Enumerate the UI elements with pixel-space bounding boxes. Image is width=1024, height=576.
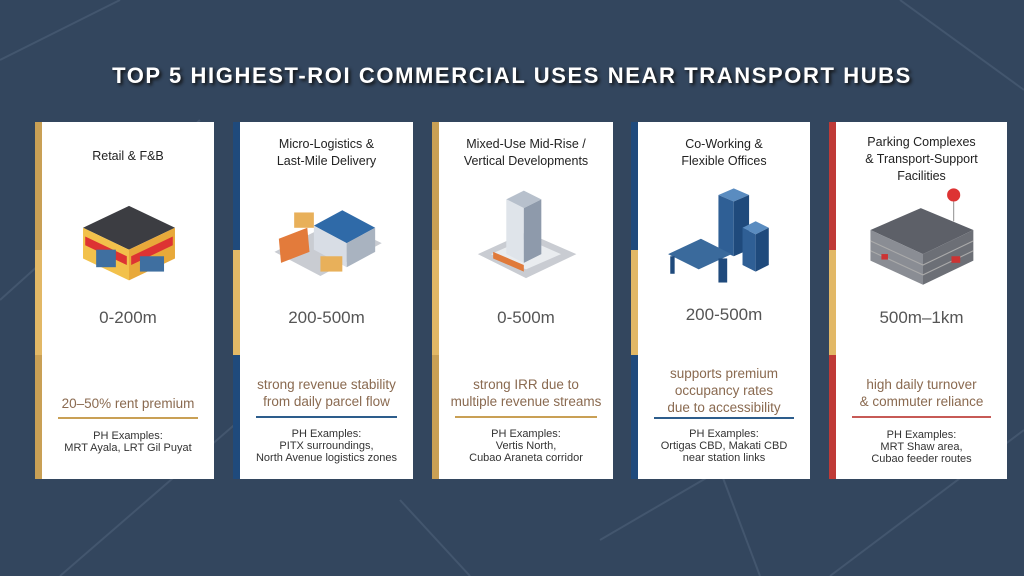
icon: parking building <box>870 188 974 285</box>
benefit: from daily parcel flow <box>263 394 390 409</box>
benefit: occupancy rates <box>675 383 773 398</box>
distance: 0-200m <box>99 308 157 327</box>
examples <box>661 428 787 464</box>
heading: Retail & F&B <box>92 149 164 163</box>
heading: & Transport-Support <box>865 152 978 166</box>
examples: Vertis North, <box>496 440 556 452</box>
examples: Cubao feeder routes <box>871 453 972 465</box>
benefit: supports premium <box>670 366 778 381</box>
panel: mixed-use <box>432 122 613 479</box>
heading <box>464 137 588 168</box>
panel: retail <box>35 122 214 479</box>
panel: co-working <box>631 122 810 479</box>
heading: Parking Complexes <box>867 135 976 149</box>
examples: PH Examples: <box>887 429 956 441</box>
examples: PITX surroundings, <box>279 440 374 452</box>
heading: Flexible Offices <box>681 154 767 168</box>
benefit: multiple revenue streams <box>451 394 601 409</box>
panel: logistics <box>233 122 413 479</box>
heading: Micro-Logistics & <box>279 137 374 151</box>
examples: Ortigas CBD, Makati CBD <box>661 440 787 452</box>
benefit: strong revenue stability <box>257 377 396 392</box>
heading <box>277 137 376 168</box>
icon: warehouse & truck <box>274 210 382 276</box>
distance: 200-500m <box>288 308 365 327</box>
benefit <box>451 377 601 409</box>
heading: Mixed-Use Mid-Rise / <box>466 137 586 151</box>
title: TOP 5 HIGHEST-ROI COMMERCIAL USES NEAR TRANSPORT HUBS <box>112 63 912 88</box>
icon: offices <box>668 188 769 283</box>
distance: 200-500m <box>686 305 762 324</box>
examples: PH Examples: <box>93 430 163 442</box>
icon: shop <box>83 206 175 280</box>
benefit: strong IRR due to <box>473 377 579 392</box>
examples: North Avenue logistics zones <box>256 452 397 464</box>
benefit <box>667 366 781 415</box>
heading: Facilities <box>897 169 946 183</box>
panel: parking <box>829 122 1007 479</box>
examples <box>871 429 972 465</box>
benefit: 20–50% rent premium <box>62 396 194 411</box>
benefit <box>860 377 983 409</box>
distance: 0-500m <box>497 308 555 327</box>
examples: near station links <box>683 452 765 464</box>
heading: Last-Mile Delivery <box>277 154 376 168</box>
distance: 500m–1km <box>879 308 964 327</box>
benefit <box>257 377 396 409</box>
benefit: high daily turnover <box>866 377 977 392</box>
benefit: due to accessibility <box>667 400 781 415</box>
examples: Cubao Araneta corridor <box>469 452 583 464</box>
heading: Co-Working & <box>685 137 763 151</box>
heading <box>681 137 767 168</box>
examples: MRT Shaw area, <box>880 441 963 453</box>
examples: MRT Ayala, LRT Gil Puyat <box>64 442 192 454</box>
heading: Vertical Developments <box>464 154 588 168</box>
examples <box>469 428 583 464</box>
icon: tower <box>478 190 576 278</box>
examples: PH Examples: <box>491 428 561 440</box>
examples <box>64 430 192 454</box>
examples: PH Examples: <box>689 428 759 440</box>
benefit: & commuter reliance <box>860 394 983 409</box>
examples <box>256 428 397 464</box>
heading <box>865 135 978 183</box>
examples: PH Examples: <box>292 428 361 440</box>
